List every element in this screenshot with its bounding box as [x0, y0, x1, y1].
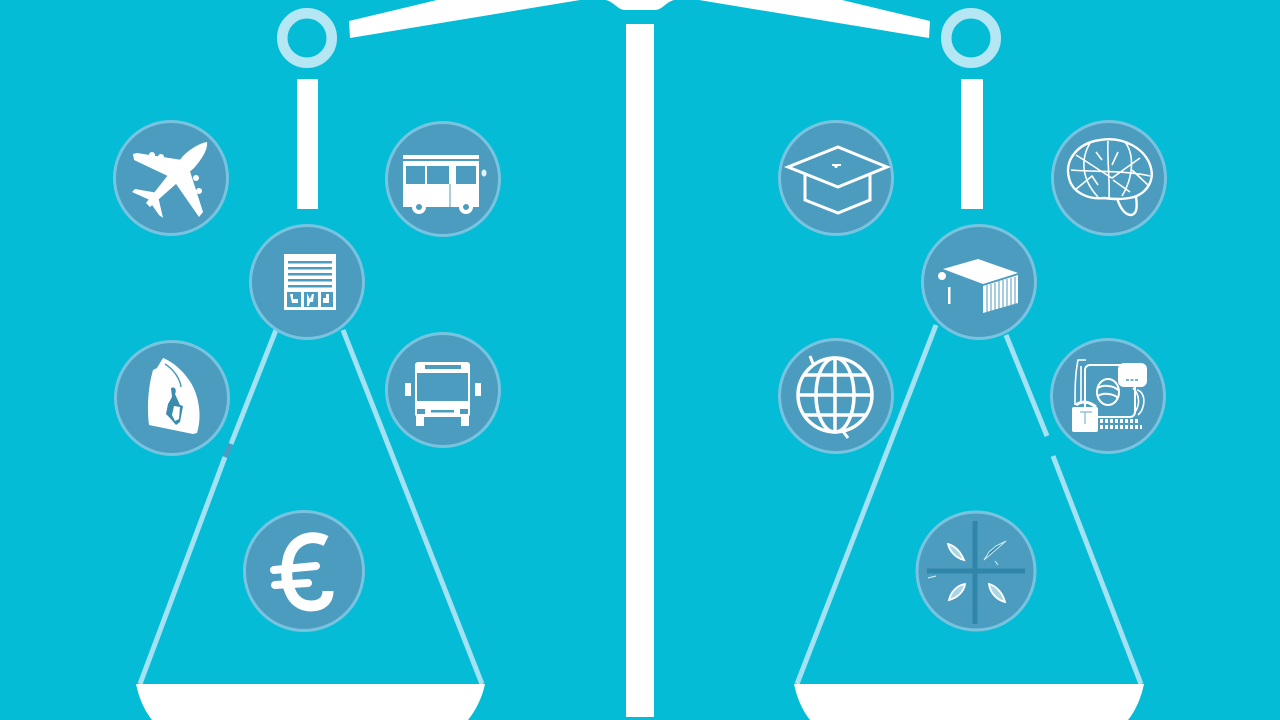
icon: devices sketch [1052, 340, 1164, 452]
right strings [797, 325, 1141, 684]
icon: graduation cap outline [780, 122, 892, 234]
icon: iron-shaped pouch [116, 342, 228, 454]
icon: side-view bus [386, 122, 500, 236]
icon: euro sign [244, 512, 364, 630]
icon: globe [780, 340, 892, 452]
left scale pan assembly [136, 13, 485, 720]
icon: document form [250, 226, 364, 338]
left strings [140, 330, 482, 684]
left ring [282, 13, 332, 63]
central pillar [626, 24, 654, 717]
left pan [136, 684, 485, 720]
icon: airplane [114, 122, 228, 234]
left hanger [297, 79, 318, 209]
icon: front-view bus [386, 334, 500, 446]
right pan [794, 684, 1144, 720]
right hanger [961, 79, 983, 209]
right scale pan assembly [794, 13, 1144, 720]
icon: brain [1052, 122, 1166, 234]
scale beam [349, 0, 930, 38]
icon: cross and leaves [917, 512, 1035, 630]
icon: mortarboard solid [922, 226, 1036, 338]
right ring [946, 13, 996, 63]
